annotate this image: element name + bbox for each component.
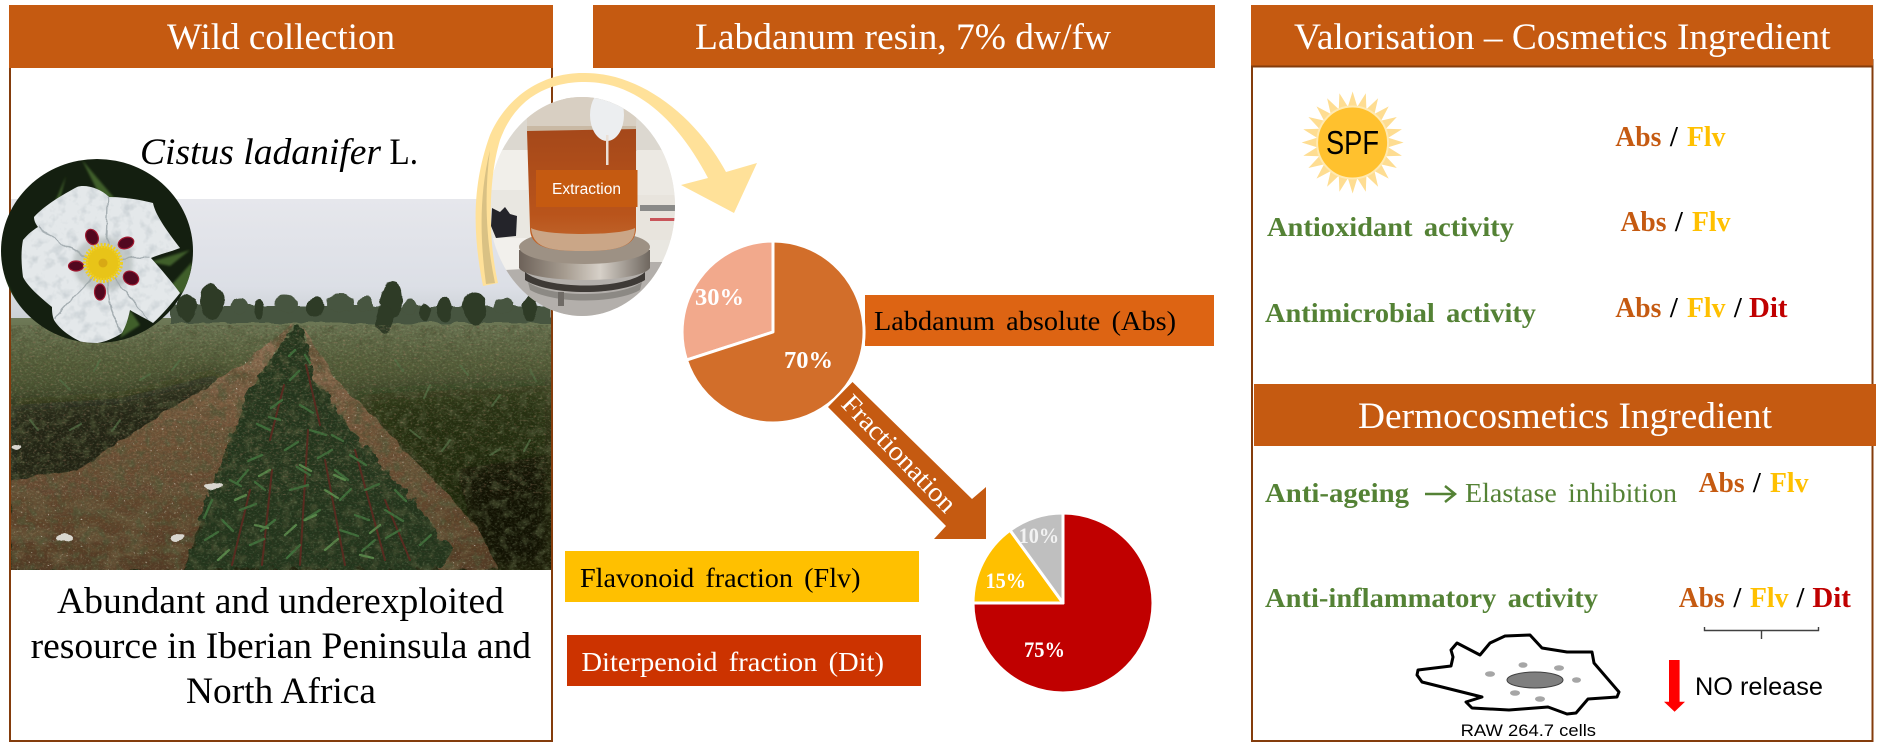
label bar: diterpenoid fraction: Diterpenoid fraction (Dit)	[582, 647, 884, 677]
label: extraction: Extraction	[552, 181, 621, 198]
heading: dermocosmetics ingredient	[1254, 384, 1876, 446]
row: antimicrobial fractions: Abs	[1615, 293, 1661, 324]
row: antimicrobial fractions: Dit	[1749, 293, 1788, 324]
row: anti-ageing fractions: /	[1752, 468, 1762, 499]
caption: species name: Cistus ladanifer	[140, 132, 382, 173]
panel: valorisation	[1252, 60, 1872, 741]
row: antimicrobial fractions	[1615, 293, 1788, 324]
caption: species name: L.	[390, 132, 418, 173]
row: anti-ageing fractions	[1699, 468, 1808, 499]
row: SPF fractions: Abs	[1615, 122, 1661, 153]
text: abundance description: Abundant and underexploited	[57, 581, 504, 622]
icon: SPF sun: SPF	[1326, 124, 1379, 161]
arrow: fractionation: Fractionation	[836, 388, 963, 519]
row: antimicrobial fractions: Flv	[1687, 293, 1726, 324]
text: anti-ageing elastase inhibition: Elastase inhibition	[1465, 478, 1678, 508]
text: antimicrobial activity: Antimicrobial activity	[1265, 298, 1537, 328]
pie chart: fractions: 75%	[1024, 637, 1065, 662]
icon: cistus flower photo	[0, 155, 196, 350]
photo: cistus field	[11, 199, 551, 570]
heading: labdanum resin: Labdanum resin, 7% dw/fw	[695, 17, 1111, 58]
text: abundance description: North Africa	[186, 671, 376, 712]
row: antioxidant fractions: Flv	[1692, 207, 1730, 238]
row: anti-inflammatory fractions: /	[1796, 583, 1806, 614]
row: anti-inflammatory fractions: Abs	[1679, 583, 1725, 614]
label bar: labdanum absolute	[865, 295, 1214, 346]
text: anti-inflammatory activity: Anti-inflammatory activity	[1265, 583, 1599, 613]
row: SPF fractions: Flv	[1687, 122, 1726, 153]
bracket: fraction grouping	[1704, 627, 1818, 639]
heading: dermocosmetics ingredient: Dermocosmetics Ingredient	[1358, 396, 1773, 437]
row: anti-inflammatory fractions: /	[1732, 583, 1742, 614]
text: abundance description: resource in Iberian Peninsula and	[31, 626, 532, 667]
text: abundance description	[31, 581, 532, 712]
panel: wild collection	[10, 60, 552, 741]
heading: labdanum resin	[593, 5, 1215, 68]
arrow: curved extraction arrow	[476, 73, 757, 286]
row: antioxidant fractions: /	[1674, 207, 1684, 238]
label bar: diterpenoid fraction	[567, 635, 921, 686]
row: antioxidant fractions	[1620, 207, 1730, 238]
row: anti-inflammatory fractions: Dit	[1812, 583, 1852, 614]
icon: RAW 264.7 cell	[1417, 635, 1619, 740]
text: anti-ageing elastase inhibition: Anti-ageing	[1265, 478, 1410, 508]
icon: extraction beaker photo	[488, 89, 678, 318]
label bar: labdanum absolute: Labdanum absolute (Abs)	[874, 306, 1176, 336]
label bar: flavonoid fraction	[565, 551, 919, 602]
icon: RAW 264.7 cell: RAW 264.7 cells	[1461, 721, 1596, 740]
pie chart: labdanum composition	[682, 241, 864, 423]
label bar: flavonoid fraction: Flavonoid fraction (Flv)	[580, 563, 860, 593]
row: anti-inflammatory fractions	[1679, 583, 1852, 614]
row: anti-ageing fractions: Flv	[1770, 468, 1808, 499]
text: antioxidant activity: Antioxidant activity	[1267, 212, 1515, 242]
icon: SPF sun	[1302, 92, 1404, 194]
pie chart: labdanum composition: 70%	[784, 348, 833, 374]
row: antioxidant fractions: Abs	[1620, 207, 1667, 238]
row: anti-ageing fractions: Abs	[1699, 468, 1745, 499]
text: anti-ageing elastase inhibition	[1265, 478, 1678, 508]
arrow: fractionation	[828, 382, 986, 539]
arrow: decrease	[1664, 660, 1685, 712]
label: extraction	[536, 170, 638, 207]
heading: wild collection: Wild collection	[167, 17, 395, 58]
pie chart: fractions: 15%	[986, 568, 1026, 593]
row: antimicrobial fractions: /	[1669, 293, 1679, 324]
row: SPF fractions	[1615, 122, 1726, 153]
pie chart: labdanum composition: 30%	[695, 285, 744, 311]
row: antimicrobial fractions: /	[1733, 293, 1743, 324]
heading: valorisation cosmetics ingredient	[1251, 5, 1873, 68]
heading: wild collection	[9, 5, 553, 68]
text: NO release: NO release	[1695, 673, 1823, 701]
pie chart: fractions: 10%	[1019, 523, 1059, 548]
row: SPF fractions: /	[1669, 122, 1679, 153]
pie chart: fractions	[973, 513, 1153, 693]
heading: valorisation cosmetics ingredient: Valorisation – Cosmetics Ingredient	[1294, 17, 1831, 58]
row: anti-inflammatory fractions: Flv	[1750, 583, 1788, 614]
